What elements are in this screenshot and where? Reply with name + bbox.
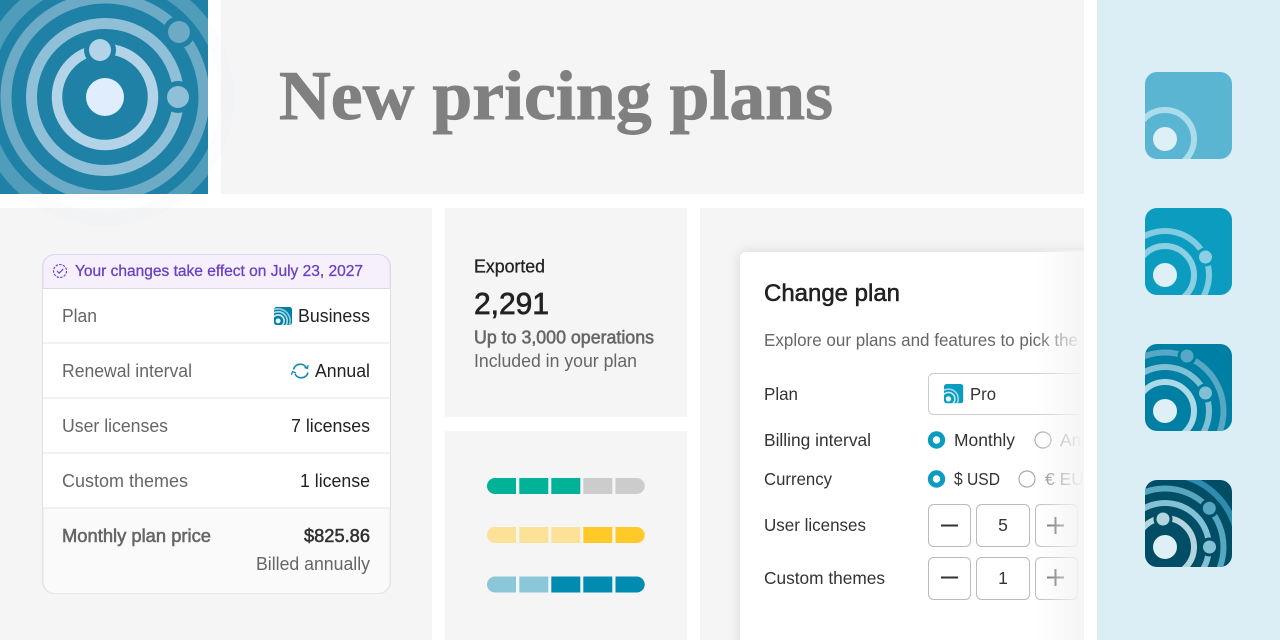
panel: plan summary background [0, 208, 432, 640]
usage stat [474, 256, 654, 371]
field: user licenses [764, 504, 1078, 546]
change plan dialog [736, 248, 1084, 640]
field: custom themes: 1 [998, 568, 1008, 588]
row: user licenses [62, 416, 370, 436]
field: user licenses: User licenses [764, 515, 866, 535]
bar: green [487, 478, 645, 494]
bar: blue [487, 576, 645, 592]
icon: tier 3 [1145, 344, 1232, 431]
panel: status bars background [445, 431, 687, 640]
field: billing interval: Annual [1060, 430, 1114, 450]
field: billing interval: Monthly [954, 430, 1015, 450]
notice banner: Your changes take effect on July 23, 2027 [75, 263, 363, 280]
dialog description: Explore our plans and features to pick the [764, 330, 1078, 350]
row: custom themes [62, 471, 370, 491]
panel: icon sidebar background [1097, 0, 1280, 640]
logo: orbit tile [0, 0, 208, 194]
bar: yellow [487, 527, 645, 543]
icon: tier 1 [1145, 72, 1232, 159]
icon: tier 2 [1145, 208, 1232, 295]
row: plan: Business [298, 306, 370, 326]
row: renewal interval [62, 361, 370, 381]
field: custom themes: Custom themes [764, 568, 885, 588]
row: monthly plan price: Billed annually [256, 554, 370, 574]
usage stat: Up to 3,000 operations [474, 328, 654, 348]
row: custom themes: Custom themes [62, 471, 188, 491]
field: plan [765, 373, 1076, 415]
usage stat: Exported [474, 256, 545, 276]
row: plan: Plan [62, 306, 97, 326]
icon: sync arrows [292, 364, 308, 378]
field: currency [764, 470, 1080, 488]
field: user licenses: 5 [998, 515, 1008, 535]
panel: title background [221, 0, 1084, 194]
field: custom themes [764, 558, 1078, 600]
dialog heading: Change plan [764, 280, 900, 307]
usage stat: 2,291 [474, 286, 549, 321]
title: New pricing plans [279, 58, 833, 135]
row: user licenses: 7 licenses [291, 416, 370, 436]
icon: tier 4 [1145, 480, 1232, 567]
status bars [487, 478, 645, 592]
row: renewal interval: Annual [315, 361, 370, 381]
panel: usage background [445, 208, 687, 417]
logo: faint rings extending outside the tile [0, 0, 227, 219]
notice banner [43, 254, 390, 288]
field: currency: € EUR [1045, 469, 1097, 489]
row: monthly plan price: $825.86 [304, 526, 370, 546]
row: renewal interval: Renewal interval [62, 361, 192, 381]
usage stat: Included in your plan [474, 351, 637, 371]
field: currency: Currency [764, 469, 832, 489]
field: billing interval: Billing interval [764, 430, 871, 450]
row: monthly plan price: Monthly plan price [62, 526, 211, 546]
field: currency: $ USD [954, 469, 1000, 489]
field: plan: Plan [764, 384, 798, 404]
panel: change plan background [700, 208, 1084, 640]
field: plan: Pro [970, 384, 996, 404]
row: user licenses: User licenses [62, 416, 168, 436]
field: billing interval [765, 431, 1080, 450]
plan summary card [42, 254, 390, 594]
row: plan [63, 307, 370, 325]
row: monthly plan price [43, 508, 390, 594]
row: custom themes: 1 license [300, 471, 370, 491]
